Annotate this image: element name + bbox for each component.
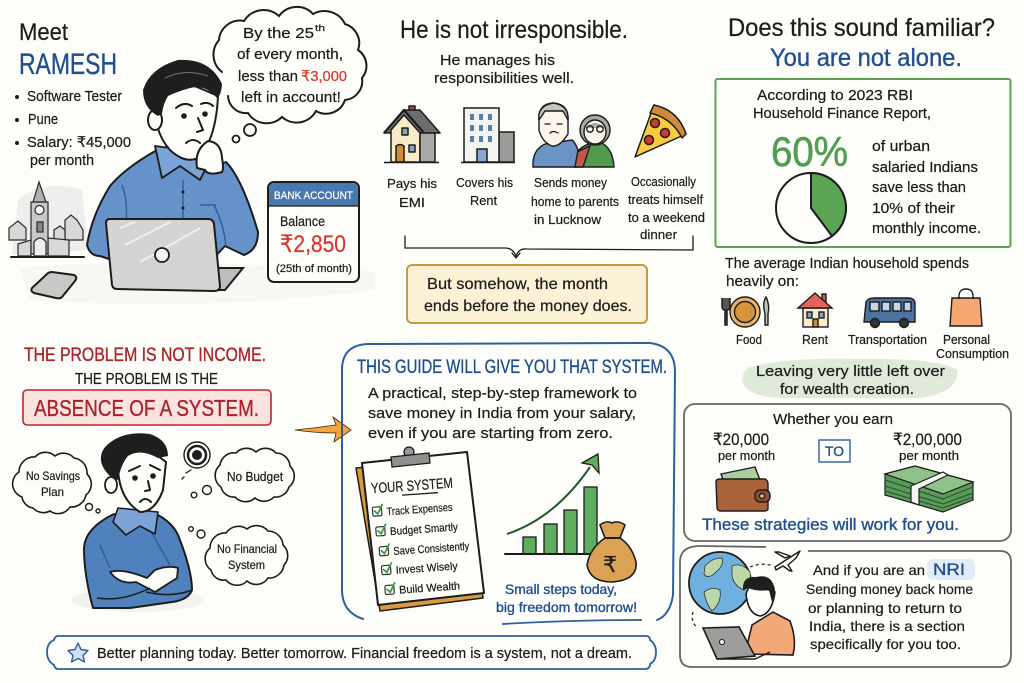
heading: He is not irresponsible. (400, 16, 628, 44)
checklist: Track Expenses (386, 502, 453, 518)
thought bubble: th (315, 23, 325, 33)
icon: wallet (716, 467, 770, 511)
heading: the problem is: THE PROBLEM IS THE (75, 371, 218, 388)
icon: man with laptop (703, 576, 794, 659)
highlight: wealth creation: Leaving very little left over (756, 364, 945, 380)
spending labels: Rent (802, 333, 829, 347)
high salary: ₹2,00,000 (893, 430, 962, 449)
subheading: He manages his (440, 52, 555, 69)
low salary: ₹20,000 (713, 430, 769, 449)
checklist: Invest Wisely (395, 560, 459, 577)
head (118, 450, 166, 512)
responsibility labels: Occasionally (631, 174, 696, 189)
spending labels: Transportation (848, 333, 927, 347)
NRI text: Sending money back home (806, 581, 973, 597)
responsibility labels (387, 174, 705, 242)
ear (148, 110, 162, 130)
stat box: 60 percent (716, 79, 1010, 247)
profile bullets: per month (30, 152, 94, 169)
face (156, 84, 218, 160)
icon: house (384, 106, 440, 162)
tagline: Small steps today, (505, 581, 617, 597)
hair (143, 60, 222, 116)
guide description: A practical, step-by-step framework to (368, 385, 637, 402)
clipboard: your system (356, 447, 484, 611)
responsibility labels: to a weekend (628, 210, 705, 225)
highlight: wealth creation (742, 359, 957, 398)
arrow to guide (295, 417, 351, 442)
bar chart (505, 454, 600, 554)
responsibility labels: in Lucknow (534, 212, 602, 227)
high salary (893, 430, 962, 463)
checklist: YOUR SYSTEM (370, 476, 453, 497)
heading: Ramesh: RAMESH (19, 48, 117, 81)
thought bubble: ₹3,000 (301, 68, 347, 85)
growth arrow (507, 467, 590, 534)
responsibility labels: home to parents (531, 194, 619, 209)
thought: no financial system: System (228, 558, 265, 572)
household text: The average Indian household spends (725, 256, 969, 272)
panel: meet Ramesh (9, 7, 375, 304)
subheading: You are not alone. (770, 44, 962, 72)
icon: phone (31, 272, 76, 298)
panel: whatever you earn (684, 404, 1011, 541)
thought bubble: of every month, (237, 46, 343, 63)
checklist: Save Consistently (393, 541, 470, 558)
profile bullets: Software Tester (27, 88, 122, 105)
icon: bus (864, 298, 915, 328)
NRI text: And if you are an (813, 562, 925, 578)
thought bubble: less than (238, 68, 298, 85)
callout: absence of a system (23, 390, 271, 425)
clip (391, 447, 430, 467)
responsibility labels: EMI (399, 195, 425, 210)
callout: month ends: ends before the money does. (424, 298, 632, 315)
thought: no savings plan (13, 452, 100, 514)
bank account card: ₹2,850 (280, 231, 346, 258)
stat box: 60 percent: Household Finance Report, (753, 106, 931, 122)
NRI text: specifically for you too. (810, 636, 961, 652)
thought: no budget: No Budget (227, 470, 283, 484)
stat description: monthly income. (872, 221, 981, 237)
callout: absence of a system: ABSENCE OF A SYSTEM. (34, 395, 259, 421)
low salary (713, 430, 775, 463)
responsibility labels: Rent (470, 193, 497, 208)
icon: airplane (775, 551, 800, 571)
thought: no budget (191, 448, 294, 502)
icon: rupee money bag (587, 522, 636, 582)
tagline: big freedom tomorrow! (496, 599, 637, 615)
stat description (872, 139, 981, 237)
profile bullets (15, 88, 131, 169)
bank account card: Balance (280, 214, 325, 229)
high salary: per month (899, 448, 959, 463)
panel: he is not irresponsible (384, 16, 705, 323)
spending labels: Personal (943, 333, 990, 347)
collar (155, 146, 208, 180)
checklist: Budget Smartly (390, 521, 459, 538)
stat box: 60 percent: According to 2023 RBI (757, 88, 913, 104)
NRI highlight: NRI (933, 560, 965, 579)
hand-drawn underline (502, 620, 642, 624)
stat description: 10% of their (872, 201, 955, 217)
heading: not income: THE PROBLEM IS NOT INCOME. (24, 345, 266, 366)
NRI text: or planning to return to (808, 600, 962, 616)
responsibility labels: dinner (640, 227, 678, 242)
thought bubble (213, 7, 366, 142)
responsibility labels: treats himself (628, 192, 703, 207)
thought bubble: By the 25 (243, 25, 314, 42)
checklist (370, 475, 473, 598)
panel: NRI (680, 546, 1011, 667)
household text: heavily on: (726, 274, 799, 290)
TO badge: TO (825, 443, 844, 459)
guide description: even if you are starting from zero. (368, 425, 613, 442)
thought: no financial system (189, 526, 288, 585)
earn conclusion: These strategies will work for you. (702, 516, 959, 534)
hands (110, 567, 178, 592)
icon: star (68, 643, 88, 662)
icon: rent house (798, 293, 832, 327)
NRI highlight (927, 559, 975, 580)
thought: no financial system: No Financial (217, 542, 277, 556)
bank account card: (25th of month) (276, 263, 352, 275)
profile bullets: Pune (28, 111, 58, 128)
thought bubble: left in account! (241, 89, 341, 106)
stat box: 60 percent: 60% (771, 128, 848, 175)
icon: stressed man arms crossed (72, 433, 204, 612)
spending labels: Consumption (936, 347, 1009, 361)
thought: no savings plan: Plan (41, 485, 64, 499)
subheading (434, 52, 574, 87)
icon: shopping bag (950, 289, 982, 326)
responsibility labels: Sends money (534, 175, 607, 190)
footer message: Better planning today. Better tomorrow. Financial freedom is a system, not a dream. (97, 645, 632, 662)
guide description (368, 385, 637, 442)
icon: parents (533, 103, 614, 167)
callout: month ends (407, 265, 647, 323)
collar (113, 508, 158, 535)
icon: food plate (722, 297, 769, 327)
guide description: save money in India from your salary, (368, 405, 636, 422)
eyes and brows (181, 113, 187, 119)
icon: city skyline (9, 182, 88, 257)
tagline (496, 581, 637, 615)
stat description: of urban (872, 139, 930, 155)
bank account card (268, 182, 359, 282)
pie chart (776, 173, 846, 243)
icon: apartment building (461, 108, 515, 162)
panel: the problem (13, 345, 294, 612)
spending labels (736, 333, 1009, 361)
icon: worried man at desk (87, 60, 258, 262)
NRI text (806, 562, 973, 652)
highlight: wealth creation: for wealth creation. (780, 382, 914, 398)
icon: pizza slice (635, 105, 686, 157)
responsibility labels: Covers his (456, 175, 513, 190)
shirt (87, 150, 258, 262)
footer banner (47, 636, 656, 669)
bank account card: BANK ACCOUNT (274, 190, 353, 202)
hand on chin (196, 141, 223, 174)
panel: does this sound familiar (716, 14, 1010, 398)
icon: globe (689, 552, 773, 628)
bracket arrow (405, 236, 693, 258)
spending labels: Food (736, 333, 762, 347)
guide heading: THIS GUIDE WILL GIVE YOU THAT SYSTEM. (357, 357, 667, 378)
icon: scribble (182, 442, 210, 479)
household text (725, 256, 969, 290)
floor shading (20, 263, 375, 304)
earn heading: Whether you earn (773, 412, 893, 428)
callout: month ends: But somehow, the month (427, 276, 608, 293)
low salary: per month (718, 448, 775, 463)
stat description: save less than (872, 180, 966, 196)
thought: no savings plan: No Savings (26, 469, 80, 483)
profile bullets: Salary: ₹45,000 (27, 134, 131, 151)
icon: cash bundle (885, 466, 973, 512)
NRI text: India, there is a section (809, 618, 965, 634)
panel: this guide (342, 343, 675, 624)
heading: Does this sound familiar? (728, 14, 995, 42)
subheading: responsibilities well. (434, 70, 574, 87)
icon: laptop (106, 219, 243, 291)
stat description: salaried Indians (872, 160, 978, 176)
TO badge (819, 440, 850, 462)
icon: rupee money bag: ₹ (603, 552, 617, 577)
checklist: Build Wealth (399, 580, 460, 597)
responsibility labels: Pays his (387, 176, 437, 191)
heading: Meet: Meet (19, 19, 68, 46)
